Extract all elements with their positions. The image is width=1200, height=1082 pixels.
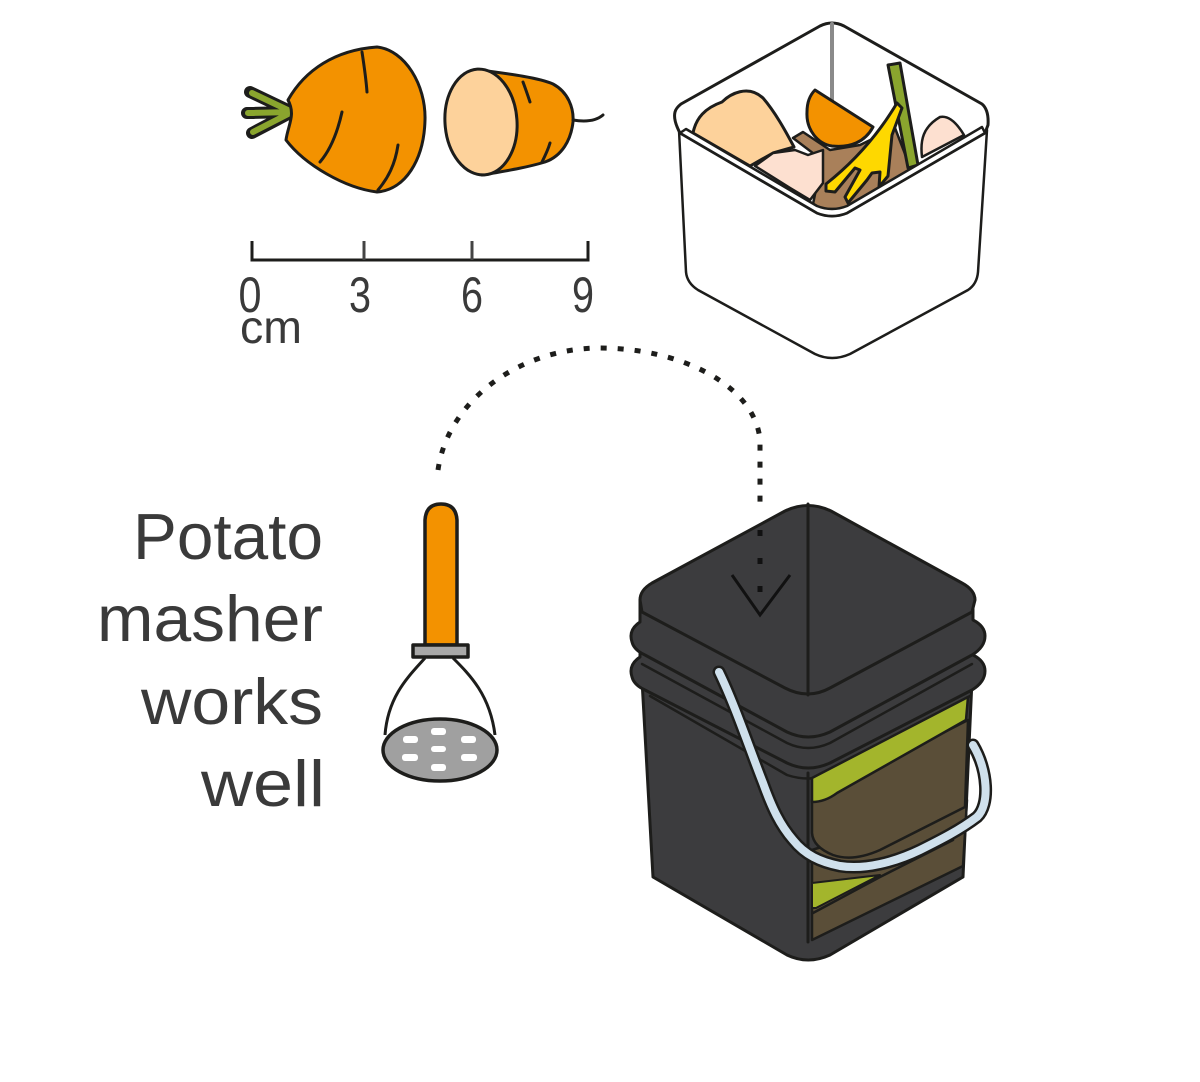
masher holes	[402, 728, 477, 771]
scale ruler: 0	[238, 267, 262, 323]
bin window: upper green layer	[812, 697, 968, 802]
caddy front lip	[680, 127, 985, 216]
food: bread slice	[693, 91, 794, 166]
text: potato masher note: masher	[97, 582, 323, 655]
text: potato masher note: Potato	[133, 500, 323, 573]
bin lower rim	[631, 620, 985, 768]
text: potato masher note: well	[200, 747, 325, 820]
food: banana peel	[826, 103, 902, 203]
bin upper rim	[631, 600, 985, 737]
arrow: dotted arrow over lid	[732, 530, 790, 615]
icon: dark compost bin	[631, 504, 985, 960]
food: pink peel left	[755, 150, 823, 200]
food: green stalk	[888, 63, 918, 168]
scale ruler: cm	[240, 301, 302, 353]
icon: carrot bottom half	[441, 67, 603, 177]
scale ruler: 3	[349, 267, 371, 323]
icon: carrot top half	[247, 47, 425, 192]
text: potato masher note: works	[140, 665, 323, 738]
icon: bin handle	[719, 672, 986, 867]
food: brown scraps	[793, 128, 912, 209]
food: pink peel right	[921, 117, 964, 157]
food: orange slice	[807, 90, 873, 146]
scale ruler: 9	[572, 267, 594, 323]
scale ruler	[238, 241, 594, 353]
text: potato masher note	[97, 500, 325, 820]
arrow: dotted path to bin	[438, 348, 760, 512]
bin lid	[640, 506, 975, 694]
bin window: upper soil	[812, 720, 968, 858]
bin window: lower soil	[812, 800, 967, 940]
bin window: lower green layer	[812, 875, 880, 908]
icon: potato masher	[383, 504, 497, 781]
icon: white caddy with food scraps	[675, 23, 988, 358]
scale ruler: 6	[461, 267, 483, 323]
